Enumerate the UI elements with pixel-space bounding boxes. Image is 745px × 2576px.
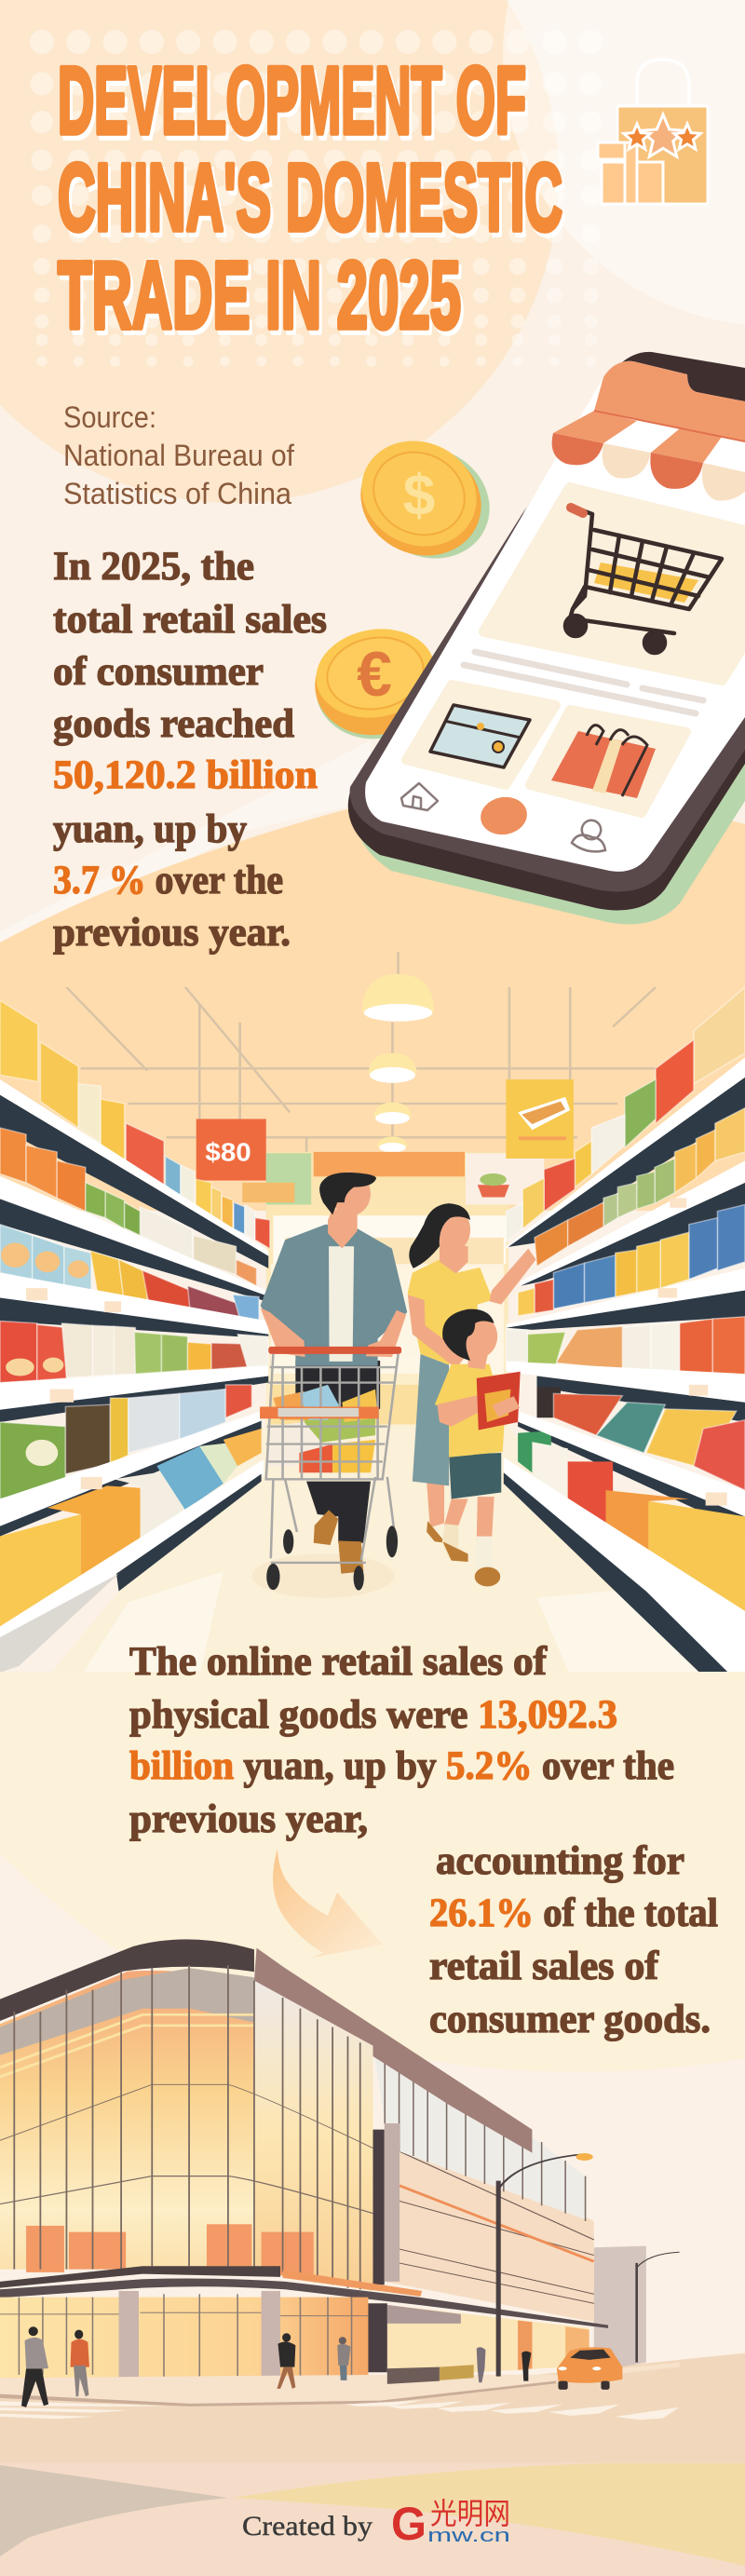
car bbox=[557, 2347, 622, 2390]
online sales statement: billion yuan, up by 5.2% over the bbox=[129, 1744, 674, 1788]
supermarket scene bbox=[0, 952, 745, 1734]
curved arrow bbox=[273, 1849, 383, 1958]
right facade glass bbox=[254, 1981, 373, 2291]
left row 3 products bbox=[0, 1321, 268, 1383]
source text bbox=[63, 400, 294, 510]
source text: Source: bbox=[63, 400, 156, 434]
source text: Statistics of China bbox=[63, 477, 291, 510]
retail sales statement: goods reached bbox=[53, 702, 294, 746]
credit: created by: Created by bbox=[242, 2511, 372, 2542]
retail sales statement: In 2025, the bbox=[53, 545, 254, 589]
footer grey wedge bbox=[0, 2465, 228, 2556]
left row 4 products bbox=[0, 1385, 251, 1499]
department store building bbox=[0, 1939, 680, 2420]
right row 5 products bbox=[518, 1430, 745, 1611]
mullions bbox=[0, 1965, 373, 2289]
pedestrians bbox=[21, 2326, 531, 2407]
right price tags bbox=[658, 1198, 727, 1506]
mother bbox=[408, 1203, 536, 1543]
logo: gmw.cn: G bbox=[391, 2498, 427, 2550]
online sales statement: physical goods were 13,092.3 bbox=[129, 1693, 617, 1737]
halftone dots bbox=[42, 42, 605, 361]
left dark shelf undersides bbox=[0, 1095, 268, 1537]
child bbox=[435, 1309, 521, 1586]
logo: gmw.cn: mw.cn bbox=[427, 2526, 510, 2546]
icon: euro coin bbox=[306, 620, 447, 749]
right base bbox=[504, 1472, 732, 1676]
logo: gmw.cn: 光明网 bbox=[430, 2497, 510, 2530]
right row 4 products bbox=[537, 1387, 745, 1490]
nav: home icon bbox=[401, 783, 438, 810]
left white shelves bbox=[0, 1079, 268, 1666]
logo: gmw.cn bbox=[391, 2497, 510, 2550]
dark column bbox=[373, 2130, 385, 2285]
roof cap bbox=[0, 1939, 254, 2021]
canopy bbox=[0, 2266, 280, 2288]
left facade bbox=[0, 1971, 254, 2270]
nav: person icon bbox=[572, 820, 605, 851]
retail sales statement: yuan, up by bbox=[53, 807, 247, 851]
retail sales statement bbox=[53, 545, 327, 955]
crosswalk bbox=[0, 2400, 680, 2420]
left price tags bbox=[26, 1288, 121, 1489]
online sales statement bbox=[129, 1640, 718, 2041]
right block bbox=[385, 2123, 594, 2322]
footer background bbox=[0, 2463, 745, 2576]
retail sales statement: 50,120.2 billion bbox=[53, 753, 318, 797]
lamps bbox=[362, 952, 434, 1152]
right white shelves bbox=[504, 1057, 745, 1676]
ground bbox=[0, 2353, 745, 2463]
online sales statement: The online retail sales of bbox=[129, 1640, 548, 1684]
retail sales statement: of consumer bbox=[53, 650, 264, 694]
left row 1 products bbox=[0, 1128, 257, 1286]
back wall bbox=[266, 1152, 508, 1433]
street lamp bbox=[498, 2153, 680, 2377]
right shelves bbox=[504, 987, 745, 1676]
right row 3 products bbox=[506, 1317, 745, 1376]
back building bbox=[594, 2246, 646, 2372]
promo signs: $80 bbox=[205, 1138, 251, 1167]
retail sales statement: total retail sales bbox=[53, 598, 327, 642]
source text: National Bureau of bbox=[63, 439, 294, 472]
online sales statement: 26.1% of the total bbox=[429, 1891, 718, 1935]
cream panel bbox=[0, 1672, 745, 2072]
left row 5 products bbox=[0, 1429, 262, 1629]
right block stripes bbox=[400, 2151, 594, 2303]
background circle: peach bbox=[0, 0, 559, 503]
right top-of-unit products bbox=[506, 987, 745, 1242]
icon: euro coin: € bbox=[357, 639, 392, 710]
title: TRADE IN 2025 bbox=[58, 242, 461, 348]
left base bbox=[116, 1474, 262, 1592]
online sales statement: accounting for bbox=[436, 1839, 684, 1883]
icon: dollar coin bbox=[343, 423, 508, 577]
phone screen bbox=[365, 361, 745, 872]
background circle: light bbox=[503, 0, 745, 326]
floor highlights bbox=[81, 1571, 703, 1676]
ground floor shops bbox=[0, 2298, 368, 2378]
icon: dollar coin: $ bbox=[403, 464, 435, 528]
left row 2 products bbox=[0, 1225, 259, 1322]
retail sales statement: previous year. bbox=[53, 911, 291, 955]
light ray behind text bbox=[0, 740, 371, 942]
father bbox=[251, 1172, 407, 1598]
father shadow on floor bbox=[251, 1553, 394, 1598]
peach dome bbox=[0, 794, 745, 1211]
phone body bbox=[348, 352, 745, 910]
right row 2 products bbox=[518, 1204, 745, 1316]
promo signs bbox=[196, 1079, 574, 1204]
street pavement bbox=[0, 2363, 680, 2405]
left shelves bbox=[0, 1000, 270, 1673]
online sales statement: previous year, bbox=[129, 1797, 368, 1841]
icon: shopping cart bbox=[565, 508, 722, 653]
phone shadow bbox=[358, 370, 745, 925]
wallet card bbox=[406, 685, 556, 785]
shopping cart bbox=[260, 1347, 401, 1591]
right row 1 products bbox=[535, 1108, 745, 1267]
brown roof band bbox=[254, 1948, 532, 2153]
icon: shopping bag and gift bbox=[598, 60, 708, 204]
retail sales statement: 3.7 % over the bbox=[53, 859, 283, 902]
floor bbox=[0, 1427, 745, 1734]
ceiling lines bbox=[66, 987, 658, 1152]
footer yellow wedge bbox=[233, 2463, 745, 2566]
title bbox=[58, 47, 562, 348]
left top-of-unit products bbox=[0, 1000, 270, 1249]
online sales statement: consumer goods. bbox=[429, 1998, 711, 2041]
right dark shelf undersides bbox=[506, 1078, 745, 1532]
awning bbox=[552, 361, 745, 501]
placeholder lines bbox=[464, 652, 703, 713]
online sales statement: retail sales of bbox=[429, 1945, 659, 1988]
phone illustration bbox=[348, 352, 745, 924]
setback glass bbox=[373, 2046, 586, 2219]
shopping bag card bbox=[530, 710, 686, 813]
nav: button bbox=[478, 793, 530, 838]
product card bbox=[484, 488, 745, 680]
planters bbox=[387, 2367, 440, 2384]
